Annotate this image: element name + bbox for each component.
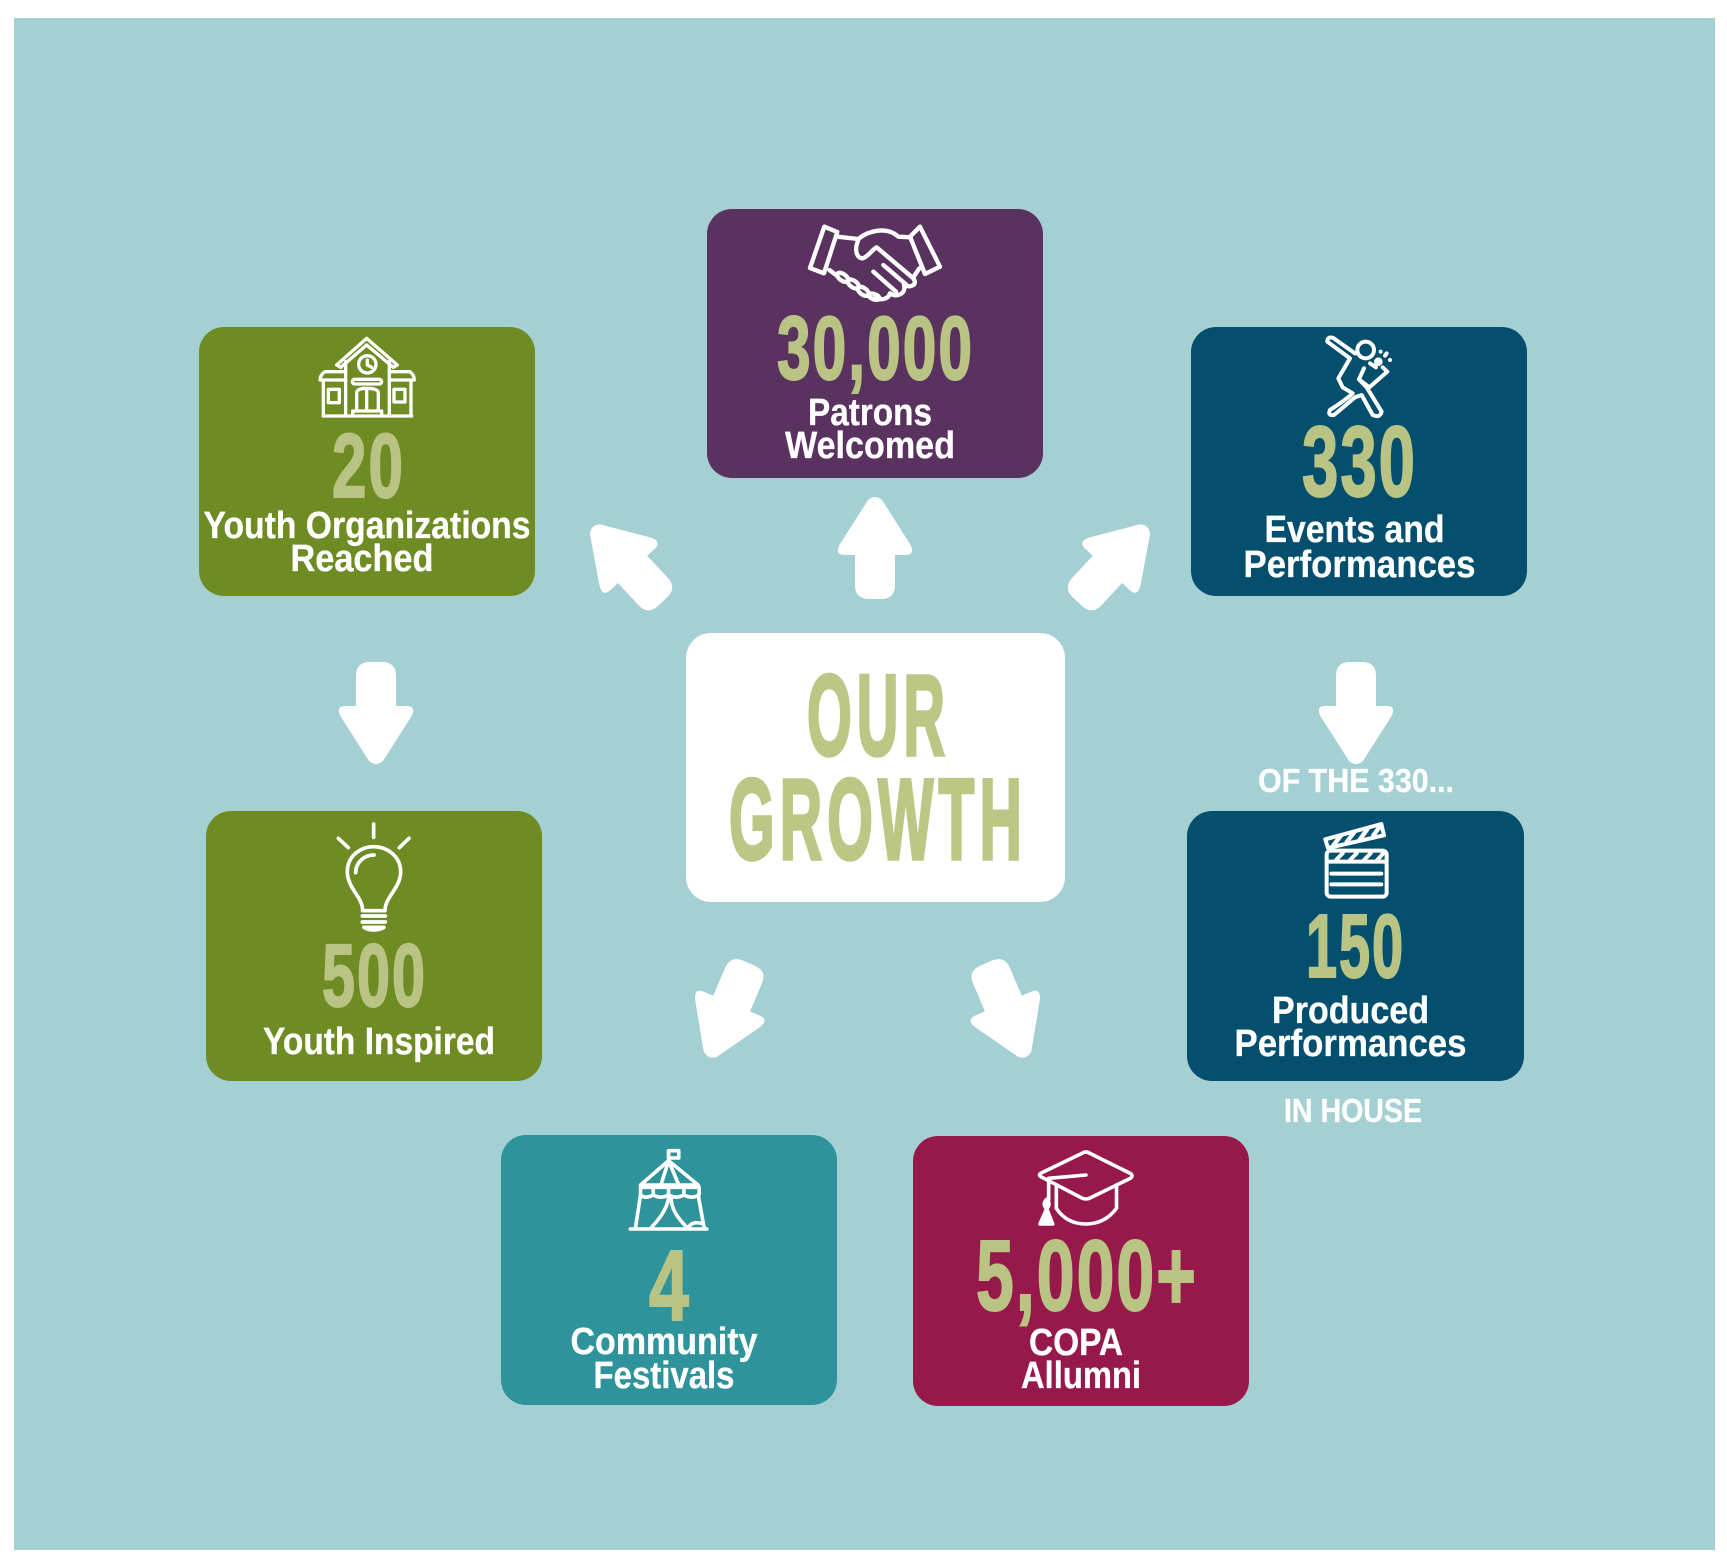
arrow: up-right to events — [1050, 502, 1174, 627]
label: produced performances — [1234, 990, 1466, 1065]
heading: our growth: GROWTH — [729, 756, 1027, 884]
arrow: down-left to community festivals — [675, 949, 783, 1072]
stat: 4: 4 — [649, 1230, 691, 1342]
label: community festivals: Festivals — [594, 1355, 734, 1397]
label: events and performances: Performances — [1244, 544, 1476, 586]
stat: 5,000+: 5,000+ — [976, 1220, 1198, 1332]
panel: patrons welcomed — [707, 209, 1043, 478]
heading: our growth: OUR — [807, 652, 950, 780]
arrow: down from youth organizations to youth inspired — [339, 662, 413, 764]
label: youth organizations reached — [204, 505, 530, 580]
label: produced performances: Produced — [1272, 990, 1429, 1032]
panel: copa alumni — [913, 1136, 1249, 1406]
arrow: down-right to alumni — [952, 949, 1060, 1072]
icon: school building — [320, 338, 414, 416]
panel: youth organizations reached — [199, 327, 535, 596]
panel: produced performances — [1187, 811, 1524, 1081]
label: events and performances — [1244, 509, 1476, 586]
panel: events and performances — [1191, 327, 1527, 596]
panel: community festivals — [501, 1135, 837, 1405]
label: youth inspired: Youth Inspired — [263, 1021, 495, 1063]
icon: graduation cap — [1039, 1152, 1132, 1224]
stat: 500: 500 — [322, 925, 427, 1025]
stat: 150: 150 — [1306, 897, 1405, 997]
stat: 20: 20 — [332, 416, 405, 517]
arrow: up-left to youth organizations — [566, 502, 690, 627]
annotation: in house: IN HOUSE — [1284, 1092, 1422, 1129]
label: youth organizations reached: Reached — [290, 538, 434, 580]
label: copa allumni — [1021, 1322, 1141, 1397]
label: community festivals — [570, 1321, 758, 1397]
icon: singer — [1327, 337, 1390, 416]
label: patrons welcomed: Welcomed — [785, 425, 955, 467]
icon: handshake — [810, 227, 940, 301]
icon: clapperboard — [1325, 824, 1387, 897]
stat: 330: 330 — [1302, 406, 1417, 518]
stat: 30,000: 30,000 — [777, 299, 974, 399]
icon: festival tent — [630, 1151, 707, 1229]
arrow: up to patrons — [838, 497, 912, 599]
icon: light bulb — [338, 824, 409, 930]
panel: youth inspired — [206, 811, 542, 1081]
heading: our growth — [729, 652, 1027, 884]
label: copa allumni: COPA — [1029, 1322, 1123, 1364]
label: patrons welcomed: Patrons — [808, 392, 932, 434]
annotation: of the 330: OF THE 330... — [1258, 762, 1454, 799]
label: youth organizations reached: Youth Organizations — [204, 505, 530, 547]
arrow: down from events to produced — [1319, 662, 1393, 764]
label: events and performances: Events and — [1264, 509, 1444, 551]
label: patrons welcomed — [785, 392, 955, 467]
label: produced performances: Performances — [1234, 1023, 1466, 1065]
label: community festivals: Community — [570, 1321, 758, 1363]
panel: center title — [686, 633, 1065, 902]
label: copa allumni: Allumni — [1021, 1355, 1141, 1397]
